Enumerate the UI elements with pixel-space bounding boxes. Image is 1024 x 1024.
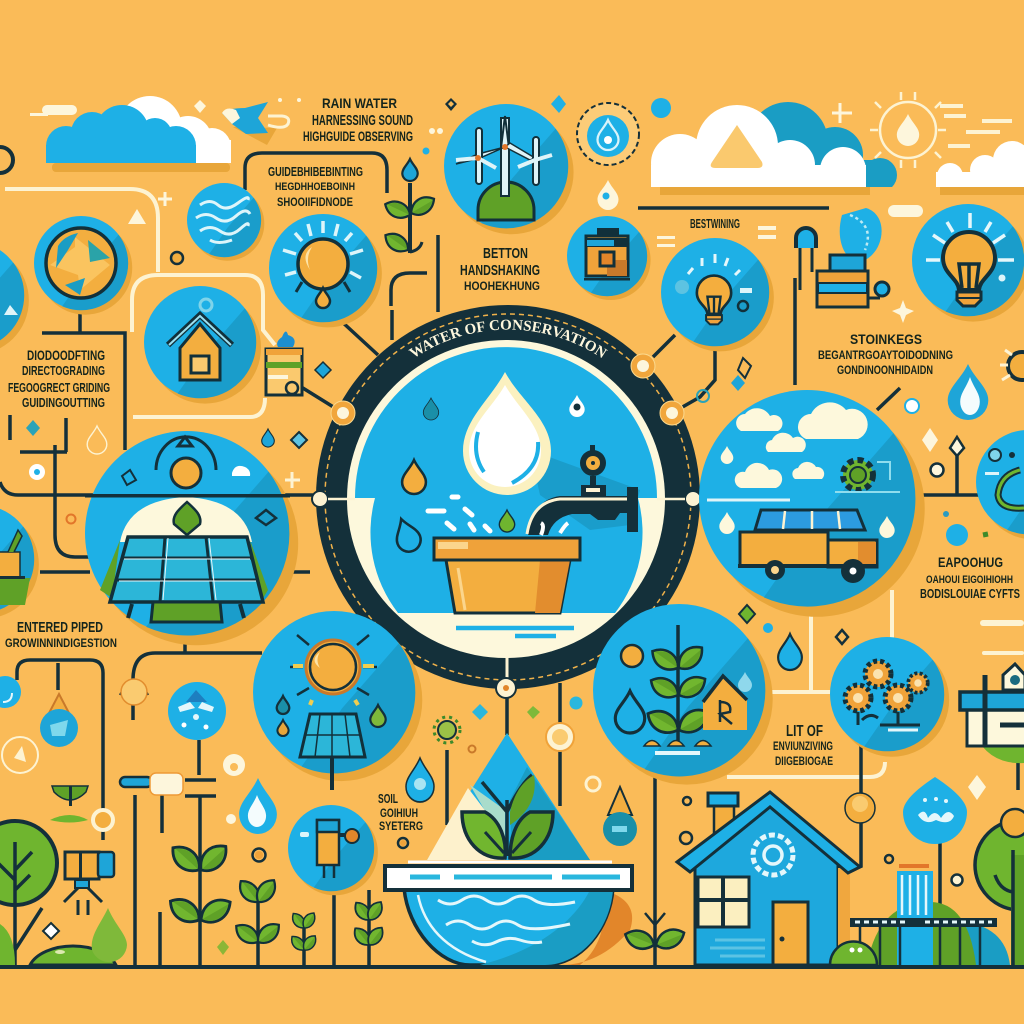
text block: better: HANDSHAKING — [460, 262, 540, 279]
blue drop badge — [903, 777, 967, 844]
text block: left column: FEGOOGRECT GRIDING — [8, 380, 110, 395]
text block: better: HOOHEKHUNG — [464, 279, 540, 293]
orb on line, bottom centre — [546, 723, 574, 751]
text block: left column — [8, 347, 110, 410]
gear — [835, 460, 900, 492]
text block: left column: DIRECTOGRADING — [22, 363, 105, 378]
icon: hanging drop, right — [603, 787, 637, 846]
text block: left column: DIODOODFTING — [27, 347, 105, 363]
tall plant — [165, 840, 235, 928]
panel: sun and small solar panel — [253, 611, 422, 790]
text block: bestwining: BESTWINING — [690, 216, 740, 231]
icon: cream ring on line — [93, 810, 113, 830]
panel: small light bulb — [661, 238, 774, 351]
emblem title — [388, 330, 628, 380]
text block: list of: ENVIUNZIVING — [773, 739, 833, 753]
panel: toolbox — [567, 216, 651, 300]
icon: small sun green — [434, 717, 460, 743]
bowl rim — [385, 866, 632, 890]
text block: rain water: HARNESSING SOUND — [312, 112, 413, 129]
text block: rain water: HIGHGUIDE OBSERVING — [303, 128, 413, 144]
panel: gears — [830, 637, 949, 757]
text block: left column: GUIDINGOUTTING — [22, 395, 105, 410]
text block: entered piped: ENTERED PIPED — [17, 619, 103, 636]
big water drop — [463, 372, 551, 495]
sprout — [462, 775, 553, 858]
small badge: left edge blue — [0, 676, 21, 708]
panel: waves — [187, 183, 264, 261]
text block: better: BETTON — [483, 245, 528, 262]
panel: globe — [34, 216, 132, 315]
panel: left plant in pot — [0, 505, 39, 618]
panel: plant and house — [593, 604, 773, 785]
text block: entered piped: GROWINNINDIGESTION — [5, 636, 117, 650]
cloud: blue left — [46, 96, 231, 172]
icon: sprinkler — [64, 852, 114, 915]
icon: orb on line, left — [120, 679, 148, 705]
drop shape — [427, 733, 590, 860]
plant 4 — [351, 899, 387, 949]
icon: right sun cog — [1000, 350, 1024, 380]
house — [677, 792, 860, 965]
icon: bird — [222, 102, 289, 145]
gear on house — [753, 835, 793, 875]
panel: house — [144, 286, 261, 404]
blue drops — [239, 180, 988, 834]
text block: guidelines: SHOOIIFIDNODE — [277, 195, 353, 209]
truck — [738, 510, 878, 583]
icon: green drop — [92, 908, 127, 962]
emblem inner disc — [347, 340, 665, 658]
text block: guidelines: GUIDEBHIBEBINTING — [268, 164, 363, 179]
door — [773, 902, 808, 965]
bowl — [560, 890, 632, 965]
bottom water bowl with sprout — [385, 733, 632, 965]
panel: sun — [269, 214, 382, 327]
panel: clouds and truck — [699, 390, 925, 617]
cloud: white centre right — [651, 102, 897, 195]
icon: left sprout — [50, 786, 88, 822]
text block: right lower — [920, 554, 1020, 601]
panel: large light bulb — [912, 204, 1024, 322]
text block: soil — [378, 791, 423, 833]
panel: right edge machine — [976, 430, 1024, 539]
icon: green hill — [30, 946, 116, 965]
plant 2 — [232, 876, 284, 965]
ground line — [0, 965, 1024, 969]
icon: left tree — [0, 821, 57, 965]
small drops in emblem — [390, 395, 585, 555]
panel: wind turbines — [444, 104, 574, 234]
window — [698, 877, 749, 927]
central emblem — [316, 305, 700, 689]
right shelter — [960, 664, 1024, 763]
icon: target ring — [2, 737, 38, 773]
text block: rain water: RAIN WATER — [322, 95, 397, 111]
clouds — [719, 402, 895, 538]
text block: rain water — [303, 95, 413, 144]
text block: right lower: EAPOOHUG — [938, 554, 1003, 570]
icon: valve — [120, 773, 183, 795]
text block: list of: LIT OF — [786, 723, 823, 740]
text block: guidelines: HEGDHHOEBOINH — [275, 181, 355, 193]
icon: pipe and water tank — [796, 208, 889, 307]
faucet — [527, 445, 638, 535]
water lines — [456, 628, 574, 636]
icon: sun with drop, top right — [870, 92, 1012, 168]
text block: right upper — [818, 331, 953, 377]
cloud triangle — [711, 125, 762, 168]
connector nodes — [312, 354, 701, 698]
fountain and fence — [830, 864, 1010, 965]
text block: list of — [773, 723, 833, 768]
panel: left edge bottle — [0, 241, 29, 354]
text block: entered piped — [5, 619, 117, 650]
text block: soil: SOIL — [378, 791, 398, 806]
plant by house — [622, 913, 687, 953]
text block: right upper: GONDINOONHIDAIDN — [837, 363, 933, 377]
emblem ring — [316, 305, 700, 689]
badge: water drop — [577, 103, 639, 165]
text block: list of: DIIGEBIOGAE — [775, 754, 833, 768]
icon: crate with flame — [266, 331, 302, 395]
panel: small pump — [288, 805, 378, 895]
flower pot — [434, 538, 580, 613]
right tree — [975, 809, 1024, 965]
text block: right upper: BEGANTRGOAYTOIDODNING — [818, 348, 953, 362]
text block: soil: SYETERG — [379, 819, 423, 833]
cream connector lines — [5, 189, 892, 777]
panel: solar panel — [85, 431, 300, 645]
water splash — [428, 497, 490, 531]
dark connector lines — [0, 153, 1018, 967]
orb on line, house — [845, 793, 875, 823]
text block: guidelines — [268, 164, 363, 209]
plant 3 — [288, 910, 319, 965]
text block: better — [460, 245, 540, 293]
text block: right upper: STOINKEGS — [850, 331, 922, 347]
central emblem: WATER OF CONSERVATION — [408, 320, 608, 358]
text block: soil: GOIHIUH — [380, 806, 418, 820]
panel: small blue diamond badge — [168, 682, 226, 740]
cloud: white far right — [936, 141, 1024, 195]
icon: plant with drop — [381, 159, 438, 257]
icon: hanging drop, left — [40, 694, 78, 747]
